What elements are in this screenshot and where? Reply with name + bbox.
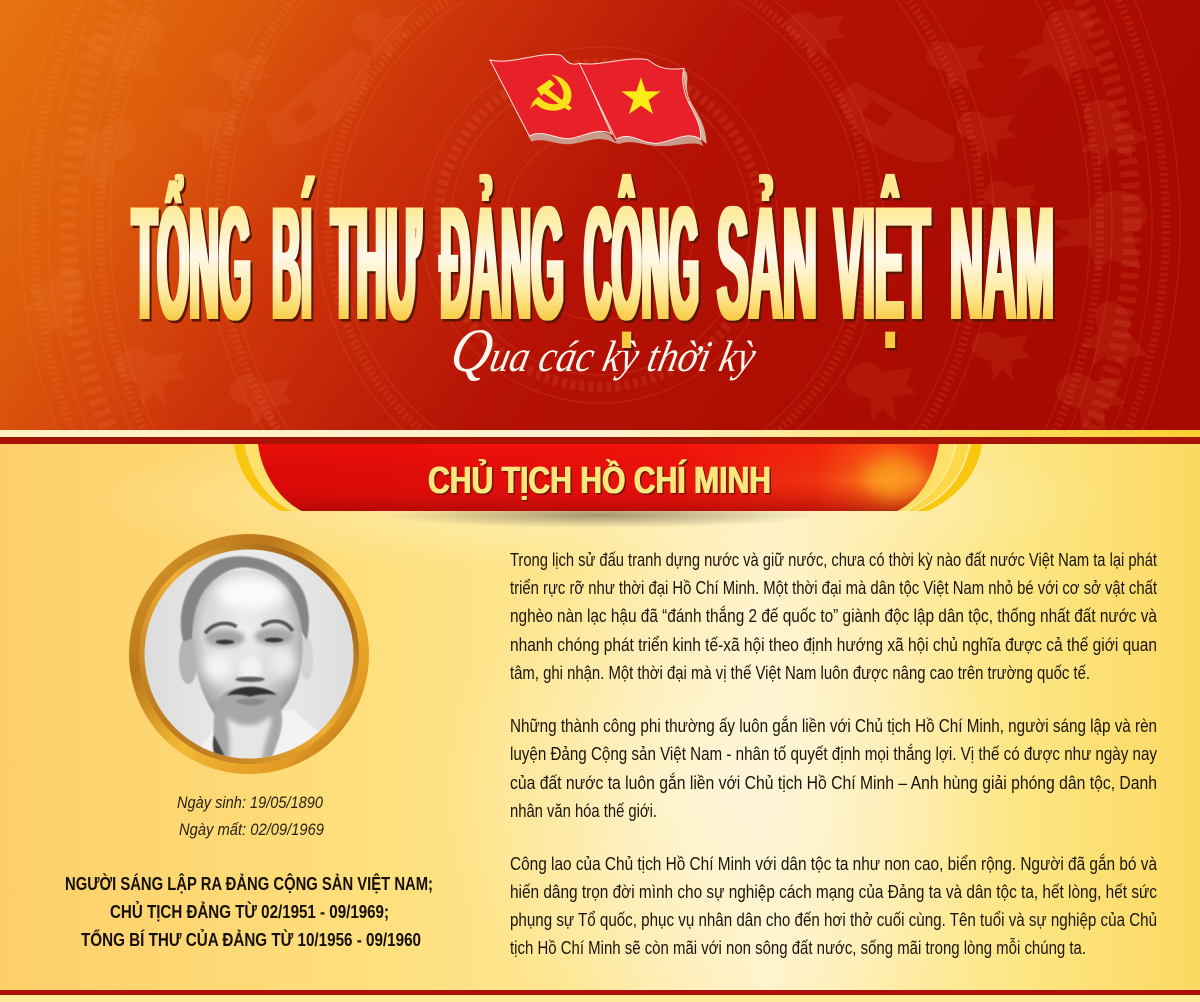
cheek highlights	[204, 653, 232, 681]
bottom rule	[0, 990, 1200, 995]
banner heading: CHỦ TỊCH HỒ CHÍ MINH	[428, 458, 771, 502]
icon: party and national flags	[490, 54, 707, 146]
text: paragraph 2: nhân văn hóa thế giới.	[510, 801, 657, 821]
text: paragraph 1: tâm, ghi nhận. Một thời đại mà vị thế Việt Nam luôn được nâng cao trên trường quốc tế.	[510, 663, 1090, 683]
national flag	[579, 59, 701, 143]
title: SẢN	[717, 173, 817, 354]
beard	[213, 687, 282, 763]
title: VIỆT	[834, 173, 930, 354]
nose	[240, 658, 262, 677]
text: paragraph 2	[510, 715, 1157, 821]
roles: CHỦ TỊCH ĐẢNG TỪ 02/1951 - 09/1969;	[110, 901, 389, 922]
icon: hammer and sickle	[530, 75, 572, 111]
roles: NGƯỜI SÁNG LẬP RA ĐẢNG CỘNG SẢN VIỆT NAM;	[65, 873, 433, 894]
eyes	[216, 640, 234, 644]
title: THƯ	[331, 173, 421, 354]
ears	[179, 636, 198, 684]
panel: biography background	[0, 430, 1200, 1002]
icon: yellow star	[621, 77, 661, 114]
title	[132, 173, 1054, 354]
dates	[177, 793, 324, 839]
roles: TỔNG BÍ THƯ CỦA ĐẢNG TỪ 10/1956 - 09/1960	[81, 929, 421, 950]
portrait with gold ring	[129, 534, 369, 774]
title: ĐẢNG	[440, 173, 564, 354]
text: paragraph 1	[510, 550, 1158, 683]
eye sockets	[205, 630, 245, 647]
panel: red header with bronze drum motif	[0, 0, 1200, 430]
roles	[65, 873, 433, 950]
drum pattern background	[20, 0, 1180, 430]
moustache	[227, 687, 277, 697]
flag thickness shadow	[528, 132, 703, 146]
title: BÍ	[272, 173, 313, 354]
title: TỔNG	[132, 173, 251, 354]
communist party flag	[490, 54, 612, 139]
text: paragraph 3	[510, 853, 1158, 958]
face	[193, 570, 303, 725]
section banner	[234, 444, 982, 528]
title: CỘNG	[584, 173, 699, 354]
text: paragraph 3: tịch Hồ Chí Minh sẽ còn mãi với non sông đất nước, sống mãi trong lòng mỗi chúng ta.	[510, 937, 1086, 958]
hair	[181, 556, 309, 642]
forehead highlight	[217, 577, 287, 610]
banner shadow	[380, 502, 820, 528]
brows	[205, 623, 237, 633]
photo	[144, 549, 354, 770]
shoulders	[200, 710, 320, 758]
top divider stripes	[0, 430, 1200, 444]
dates: Ngày sinh: 19/05/1890	[177, 793, 323, 812]
subtitle: Qua các kỳ thời kỳ	[445, 316, 764, 385]
gold ribbons	[234, 444, 982, 511]
banner highlight	[863, 458, 927, 498]
beard shadow	[212, 735, 226, 756]
red banner	[258, 444, 939, 511]
dates: Ngày mất: 02/09/1969	[179, 820, 324, 839]
